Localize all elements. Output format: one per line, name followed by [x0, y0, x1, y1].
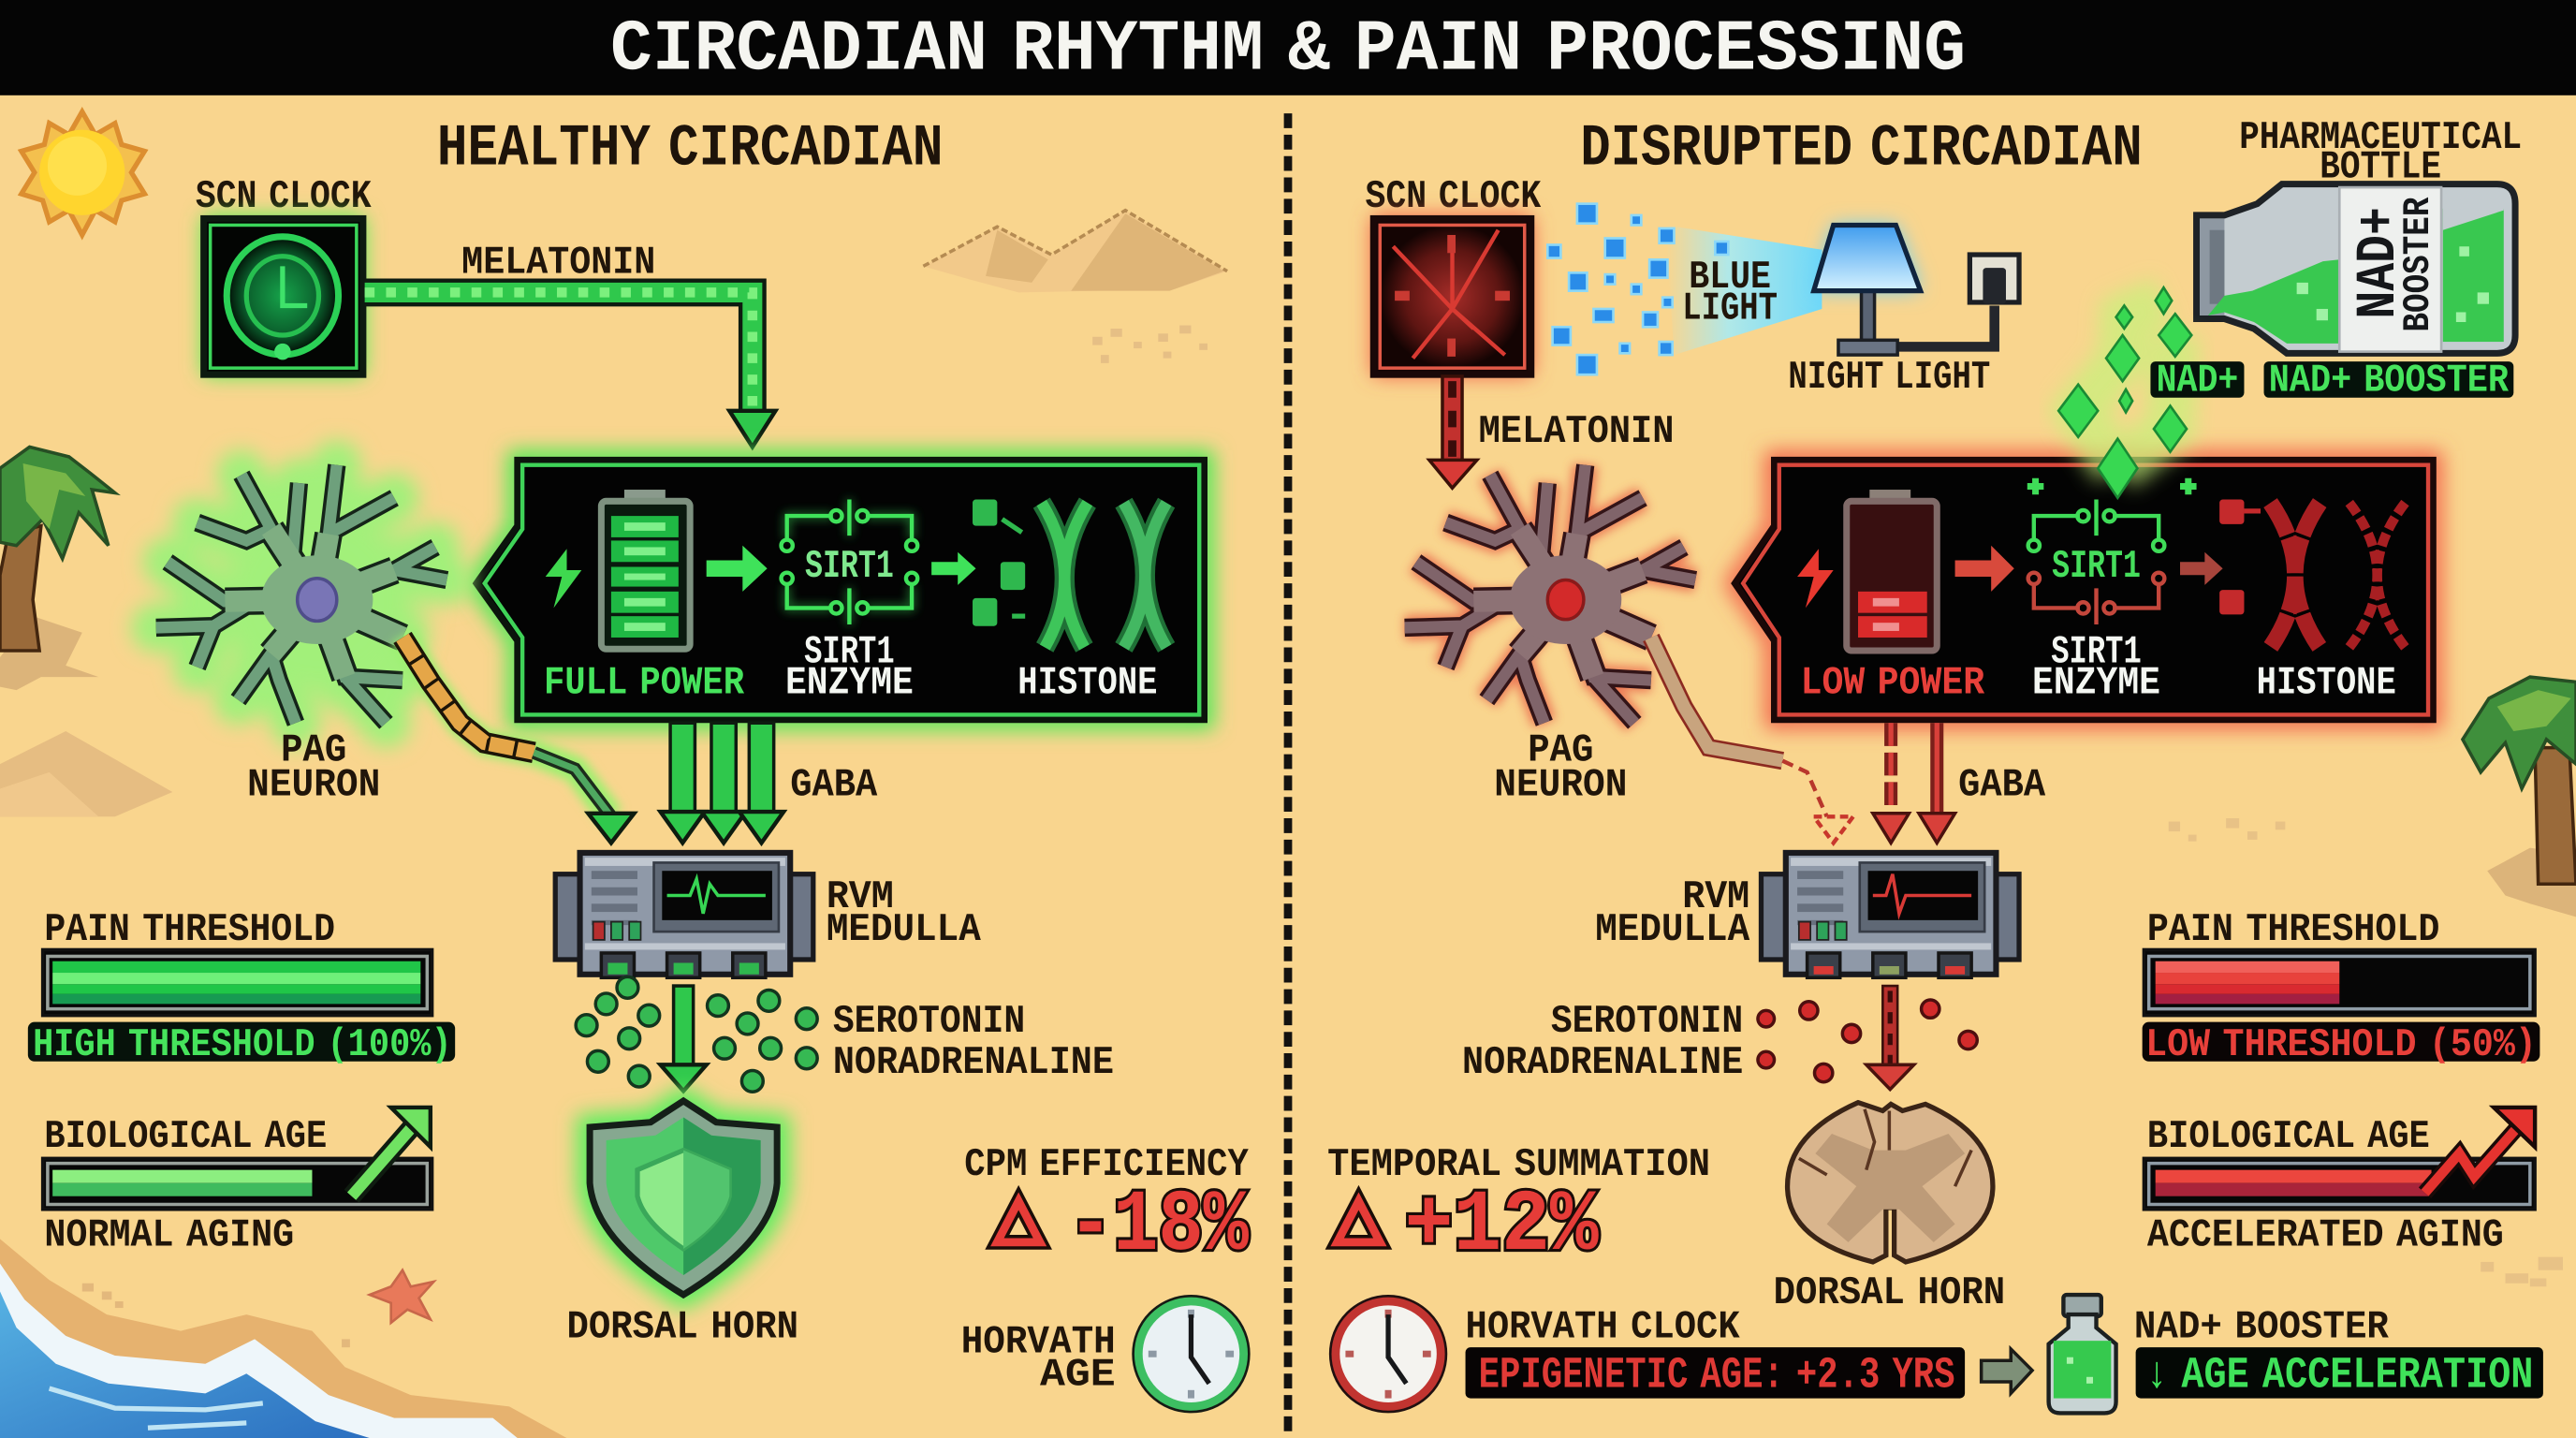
- pill: epigenetic age: EPIGENETIC AGE: +2.3 YRS: [1479, 1352, 1955, 1401]
- icon: green shield: [590, 1101, 777, 1295]
- label: accelerated aging: ACCELERATED AGING: [2147, 1214, 2504, 1258]
- arrows: gaba disrupted: [1873, 723, 1955, 843]
- label: melatonin disrupted: MELATONIN: [1479, 411, 1674, 455]
- panel: healthy cell energy: [476, 460, 1204, 720]
- nad+ particles: [2058, 287, 2191, 498]
- icon: red horvath clock: [1331, 1297, 1445, 1412]
- arrow: rvm to dorsal horn healthy: [661, 986, 707, 1091]
- panel: disrupted cell energy: [1734, 460, 2433, 720]
- bar: biological age healthy: [43, 1158, 432, 1210]
- labels: serotonin noradrenaline healthy: SEROTONIN: [833, 1001, 1025, 1045]
- icon: sun: [22, 111, 144, 235]
- label: rvm medulla healthy: RVM: [827, 875, 894, 920]
- label: pain threshold healthy: PAIN THRESHOLD: [44, 909, 335, 953]
- label: pharmaceutical bottle: BOTTLE: [2320, 146, 2441, 191]
- pill: nad+ booster: NAD+ BOOSTER: [2269, 360, 2510, 404]
- title bar: [0, 0, 2576, 95]
- label: pag neuron healthy: PAG: [281, 729, 346, 774]
- bar: pain threshold healthy: [43, 949, 432, 1016]
- center divider: [1286, 113, 1290, 1438]
- icon: rvm device healthy: [555, 853, 813, 977]
- label: pharmaceutical bottle: [2239, 117, 2522, 191]
- label: pag neuron disrupted: PAG: [1528, 729, 1593, 774]
- label: cpm efficiency: CPM EFFICIENCY: [964, 1144, 1250, 1188]
- icon: damaged spinal cord: [1788, 1103, 1993, 1262]
- label: gaba healthy: GABA: [790, 764, 878, 809]
- label: horvath age: AGE: [1040, 1354, 1116, 1399]
- label: sirt1 enzyme disrupted: ENZYME: [2032, 662, 2160, 707]
- icon: red scn clock: [1372, 215, 1533, 376]
- label: melatonin healthy: MELATONIN: [461, 242, 655, 286]
- label: dorsal horn healthy: DORSAL HORN: [567, 1306, 798, 1351]
- labels: serotonin noradrenaline healthy: NORADRENALINE: [833, 1042, 1114, 1086]
- icon: sirt1 circuit: [782, 500, 917, 624]
- label: rvm medulla disrupted: MEDULLA: [1595, 909, 1750, 953]
- neurotransmitter dots disrupted: [1758, 1000, 1977, 1082]
- icon: low battery: [1847, 490, 1937, 651]
- label: rvm medulla disrupted: [1595, 875, 1750, 953]
- sand speckles: [2169, 818, 2563, 1286]
- labels: serotonin noradrenaline healthy: [833, 1001, 1114, 1086]
- starfish: [370, 1270, 433, 1323]
- left palm tree: [0, 447, 115, 690]
- stat: temporal delta: +12%: [1405, 1177, 1599, 1275]
- label: sirt1 enzyme disrupted: [2032, 631, 2160, 707]
- label: histone disrupted: HISTONE: [2257, 662, 2396, 707]
- arrow: battery to sirt1 red: [1955, 546, 2014, 592]
- icon: night light lamp: [1814, 225, 2019, 355]
- label: dorsal horn disrupted: DORSAL HORN: [1774, 1271, 2005, 1316]
- icon: sirt1 circuit half repaired: [2027, 478, 2197, 624]
- arrow: rvm to dorsal horn disrupted: [1866, 986, 1914, 1090]
- labels: serotonin noradrenaline disrupted: SEROTONIN: [1551, 1001, 1743, 1045]
- icon: green histones: [973, 500, 1166, 648]
- icon: disrupted pag neuron: [1405, 465, 1853, 843]
- dunes top: [923, 211, 1227, 363]
- arrow: melatonin healthy: [365, 292, 775, 447]
- label: horvath age: [961, 1321, 1116, 1399]
- stat: cpm delta: -18%: [1068, 1177, 1249, 1275]
- heading: healthy: HEALTHY CIRCADIAN: [437, 115, 943, 183]
- label: rvm medulla disrupted: RVM: [1682, 875, 1749, 920]
- label: rvm medulla healthy: [827, 875, 982, 953]
- icon: nad+ bottle: NAD+: [2349, 207, 2411, 318]
- icon: sirt1 circuit: SIRT1: [805, 546, 894, 590]
- pill: nad+: NAD+: [2157, 360, 2238, 404]
- icon: red bolt: [1797, 549, 1834, 608]
- icon: green bolt: [546, 549, 581, 608]
- label: pain threshold disrupted: PAIN THRESHOLD: [2147, 909, 2439, 953]
- blue light beam and particles: [1547, 204, 1822, 374]
- label: sirt1 enzyme: [785, 631, 914, 707]
- arrow: battery to sirt1: [707, 546, 768, 592]
- label: nad+ booster lower: NAD+ BOOSTER: [2134, 1306, 2390, 1351]
- label: scn clock healthy: SCN CLOCK: [196, 176, 373, 220]
- icon: sirt1 circuit half repaired: SIRT1: [2052, 546, 2141, 590]
- icon: nad+ bottle: BOOSTER: [2397, 197, 2439, 332]
- label: sirt1 enzyme: SIRT1: [804, 631, 895, 675]
- label: low power: LOW POWER: [1801, 662, 1985, 707]
- label: blue light: LIGHT: [1682, 287, 1778, 332]
- label: horvath age: HORVATH: [961, 1321, 1116, 1365]
- icon: small nad+ bottle: [2049, 1295, 2116, 1413]
- label: normal aging: NORMAL AGING: [44, 1214, 294, 1258]
- label: horvath clock: HORVATH CLOCK: [1466, 1306, 1741, 1351]
- stat: cpm delta: [997, 1177, 1249, 1275]
- labels: serotonin noradrenaline disrupted: NORADRENALINE: [1462, 1042, 1743, 1086]
- labels: serotonin noradrenaline disrupted: [1462, 1001, 1743, 1086]
- icon: full battery: [601, 490, 690, 649]
- icon: rvm device disrupted: [1761, 853, 2019, 977]
- label: pharmaceutical bottle: PHARMACEUTICAL: [2239, 117, 2522, 161]
- arrow: biological age healthy: [352, 1108, 431, 1196]
- label: histone: HISTONE: [1017, 662, 1157, 707]
- label: temporal summation: TEMPORAL SUMMATION: [1327, 1144, 1710, 1188]
- bar: biological age disrupted: [2144, 1158, 2535, 1210]
- label: pag neuron disrupted: [1494, 729, 1627, 809]
- label: full power: FULL POWER: [544, 662, 745, 707]
- label: night light: NIGHT LIGHT: [1788, 357, 1990, 401]
- label: biological age healthy: BIOLOGICAL AGE: [44, 1116, 327, 1160]
- icon: damaged histones: [2219, 500, 2405, 648]
- arrow: biological age zigzag: [2425, 1108, 2535, 1193]
- right palm tree: [2463, 677, 2576, 917]
- label: rvm medulla healthy: MEDULLA: [827, 909, 982, 953]
- icon: green scn clock: [202, 215, 365, 376]
- label: pag neuron healthy: [247, 729, 380, 809]
- label: scn clock disrupted: SCN CLOCK: [1365, 176, 1542, 220]
- label: gaba disrupted: GABA: [1958, 764, 2046, 809]
- label: blue light: BLUE: [1689, 257, 1771, 301]
- arrow: sirt1 to histone red: [2180, 552, 2223, 585]
- beach and sea: [0, 1239, 567, 1438]
- pill: low threshold: LOW THRESHOLD (50%): [2145, 1023, 2537, 1068]
- label: sirt1 enzyme: ENZYME: [785, 662, 914, 707]
- label: pag neuron disrupted: NEURON: [1494, 764, 1627, 809]
- icon: healthy pag neuron: [156, 465, 634, 843]
- icon: green horvath clock: [1134, 1297, 1249, 1412]
- arrow: melatonin disrupted: [1429, 376, 1477, 488]
- arrow: sirt1 to histone: [931, 552, 976, 585]
- label: sirt1 enzyme disrupted: SIRT1: [2051, 631, 2142, 675]
- dune bottom left: [0, 731, 172, 816]
- neurotransmitter dots healthy: [576, 976, 817, 1092]
- bar: pain threshold disrupted: [2144, 949, 2535, 1016]
- label: pag neuron healthy: NEURON: [247, 764, 380, 809]
- icon: nad+ bottle: [2197, 184, 2515, 353]
- label: blue light: [1682, 257, 1778, 332]
- title bar: CIRCADIAN RHYTHM & PAIN PROCESSING: [610, 10, 1966, 92]
- pill: high threshold: HIGH THRESHOLD (100%): [33, 1023, 452, 1068]
- label: biological age disrupted: BIOLOGICAL AGE: [2147, 1116, 2430, 1160]
- heading: disrupted: DISRUPTED CIRCADIAN: [1580, 115, 2143, 183]
- arrows: gaba healthy: [661, 723, 783, 843]
- arrow: clock to booster: [1982, 1349, 2032, 1393]
